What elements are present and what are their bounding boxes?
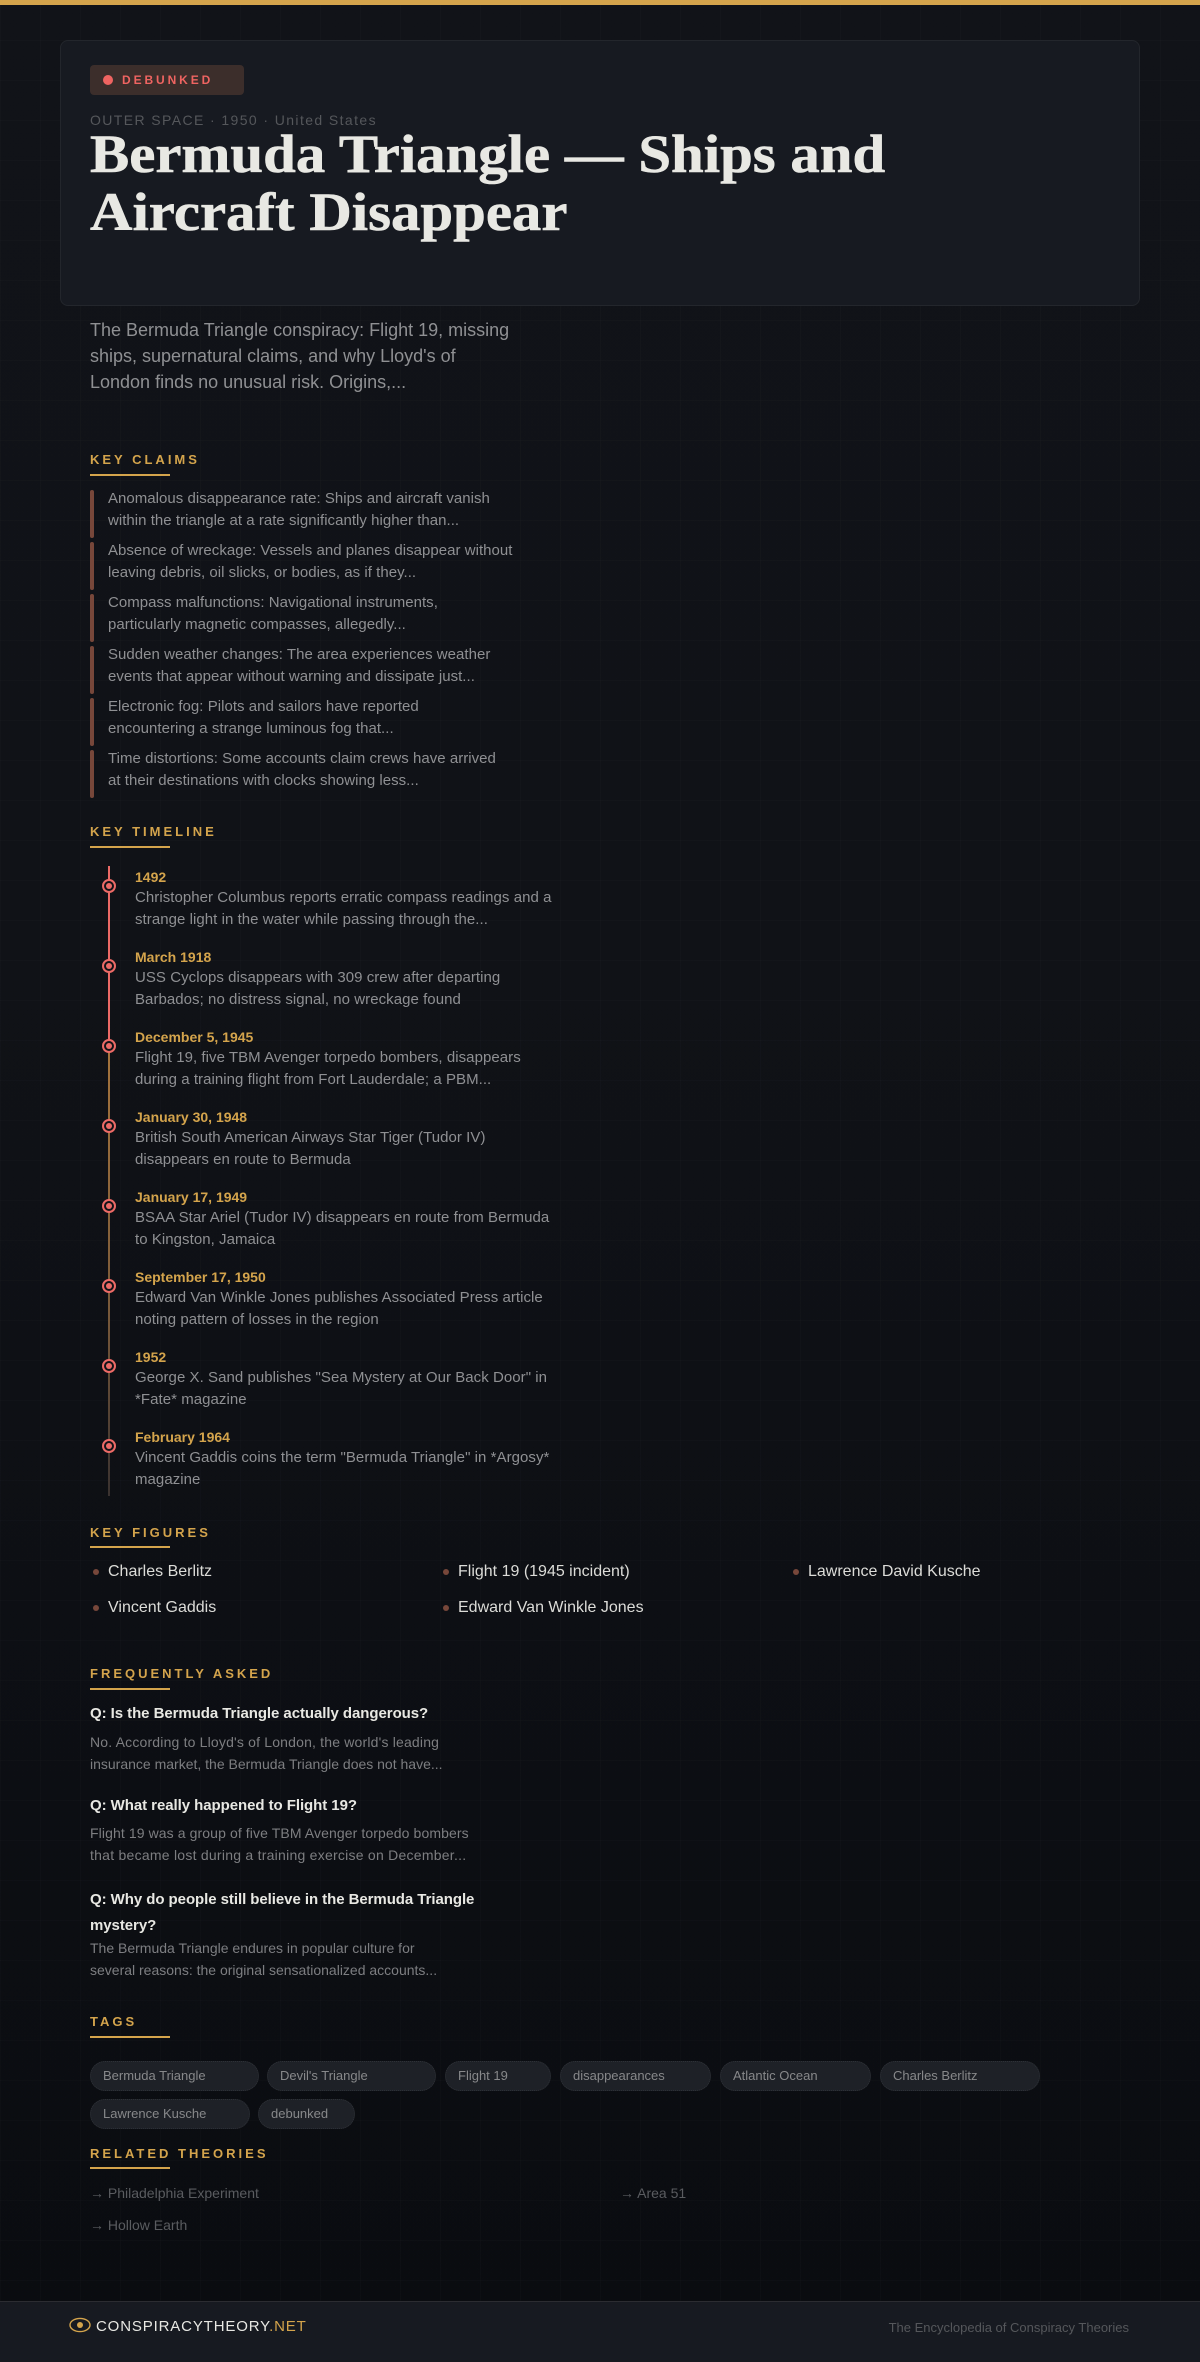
- claim 2: Absence of wreckage: Vessels and planes disappear without: [108, 542, 512, 559]
- faq question 3: mystery?: [90, 1917, 156, 1934]
- claim 6: [90, 750, 496, 798]
- tag: disappearances: [573, 2068, 665, 2083]
- lead paragraph: London finds no unusual risk. Origins,...: [90, 372, 406, 392]
- event January 17, 1949: to Kingston, Jamaica: [135, 1231, 275, 1248]
- event September 17, 1950: noting pattern of losses in the region: [135, 1311, 379, 1328]
- tag: [560, 2061, 711, 2091]
- chart: timeline: January 17, 1949: [135, 1189, 247, 1205]
- event March 1918: USS Cyclops disappears with 309 crew after departing: [135, 969, 500, 986]
- figure: Charles Berlitz: Charles Berlitz: [108, 1563, 212, 1580]
- faq answer 3: several reasons: the original sensationalized accounts...: [90, 1962, 437, 1978]
- tag: Bermuda Triangle: [103, 2068, 206, 2083]
- panel: tags: [90, 2061, 1040, 2129]
- claim 4: [90, 646, 490, 694]
- claim 5: [90, 698, 419, 746]
- tag: Devil's Triangle: [280, 2068, 368, 2083]
- tag: [258, 2099, 355, 2129]
- tag: Lawrence Kusche: [103, 2106, 206, 2121]
- claim 1: within the triangle at a rate significantly higher than...: [108, 512, 459, 529]
- faq answer 2: that became lost during a training exercise on December...: [90, 1847, 466, 1863]
- claim 1: [90, 490, 490, 538]
- related link: Area 51: → Area 51: [620, 2185, 686, 2201]
- tag: Atlantic Ocean: [733, 2068, 818, 2083]
- claim 6: Time distortions: Some accounts claim crews have arrived: [108, 750, 496, 767]
- lead paragraph: The Bermuda Triangle conspiracy: Flight 19, missing: [90, 320, 509, 340]
- claim 6: at their destinations with clocks showing less...: [108, 772, 419, 789]
- faq answer 1: No. According to Lloyd's of London, the world's leading: [90, 1734, 439, 1750]
- tag: [90, 2099, 250, 2129]
- event 1952: [102, 1349, 547, 1408]
- heading: tags: TAGS: [90, 2014, 137, 2029]
- claim 3: particularly magnetic compasses, allegedly...: [108, 616, 406, 633]
- figure: Flight 19: Flight 19 (1945 incident): [458, 1563, 630, 1580]
- event January 30, 1948: disappears en route to Bermuda: [135, 1151, 351, 1168]
- tag: [267, 2061, 436, 2091]
- footer logo: CONSPIRACYTHEORY.NET: [96, 2318, 307, 2335]
- event December 5, 1945: Flight 19, five TBM Avenger torpedo bombers, disappears: [135, 1049, 521, 1066]
- chart: timeline: [102, 866, 552, 1496]
- panel: footer: [0, 2301, 1200, 2362]
- claim 2: [90, 542, 512, 590]
- timeline spine: [108, 866, 110, 1496]
- event 1952: George X. Sand publishes "Sea Mystery at Our Back Door" in: [135, 1369, 547, 1386]
- tag: [445, 2061, 551, 2091]
- chart: timeline: March 1918: [135, 949, 211, 965]
- heading: frequently asked: FREQUENTLY ASKED: [90, 1666, 273, 1681]
- top accent bar: [0, 0, 1200, 5]
- chart: timeline: 1952: [135, 1349, 166, 1365]
- event December 5, 1945: [102, 1029, 521, 1088]
- lead paragraph: [90, 320, 509, 392]
- event February 1964: Vincent Gaddis coins the term "Bermuda Triangle" in *Argosy*: [135, 1449, 549, 1466]
- event September 17, 1950: Edward Van Winkle Jones publishes Associated Press article: [135, 1289, 543, 1306]
- event 1492: Christopher Columbus reports erratic compass readings and a: [135, 889, 551, 906]
- panel: key figures list: [93, 1563, 981, 1616]
- faq answer 2: Flight 19 was a group of five TBM Avenger torpedo bombers: [90, 1825, 469, 1841]
- lead paragraph: ships, supernatural claims, and why Lloyd's of: [90, 346, 456, 366]
- footer tagline: The Encyclopedia of Conspiracy Theories: [889, 2320, 1129, 2335]
- claim 4: events that appear without warning and dissipate just...: [108, 668, 475, 685]
- heading: related theories: RELATED THEORIES: [90, 2146, 268, 2161]
- figure: Edward Van Winkle Jones: Edward Van Winkle Jones: [458, 1599, 644, 1616]
- panel: header card: [60, 40, 1140, 306]
- claim 5: Electronic fog: Pilots and sailors have reported: [108, 698, 419, 715]
- tag: Flight 19: [458, 2068, 508, 2083]
- badge: debunked: [90, 65, 244, 95]
- badge label: DEBUNKED: [122, 73, 213, 87]
- figure: Vincent Gaddis: Vincent Gaddis: [108, 1599, 216, 1616]
- chart: timeline: 1492: [135, 869, 166, 885]
- event February 1964: [102, 1429, 549, 1488]
- faq question 2: Q: What really happened to Flight 19?: [90, 1797, 357, 1814]
- chart: timeline: January 30, 1948: [135, 1109, 247, 1125]
- panel: key claims list: [90, 490, 512, 798]
- claim 5: encountering a strange luminous fog that...: [108, 720, 394, 737]
- icon: eye: [69, 2318, 91, 2332]
- event February 1964: magazine: [135, 1471, 200, 1488]
- heading: key figures: KEY FIGURES: [90, 1525, 211, 1540]
- faq question 3: [90, 1891, 474, 1934]
- claim 4: Sudden weather changes: The area experiences weather: [108, 646, 490, 663]
- event 1492: strange light in the water while passing through the...: [135, 911, 488, 928]
- faq answer 3: [90, 1940, 437, 1978]
- chart: timeline: February 1964: [135, 1429, 230, 1445]
- related link: Hollow Earth: → Hollow Earth: [90, 2217, 187, 2233]
- icon: status dot: [103, 75, 113, 85]
- event December 5, 1945: during a training flight from Fort Lauderdale; a PBM...: [135, 1071, 491, 1088]
- faq answer 2: [90, 1825, 469, 1863]
- faq answer 1: insurance market, the Bermuda Triangle does not have...: [90, 1756, 443, 1772]
- tag: [880, 2061, 1040, 2091]
- faq question 3: Q: Why do people still believe in the Bermuda Triangle: [90, 1891, 474, 1908]
- event January 17, 1949: [102, 1189, 550, 1248]
- event January 30, 1948: British South American Airways Star Tiger (Tudor IV): [135, 1129, 486, 1146]
- tag: [90, 2061, 259, 2091]
- claim 3: [90, 594, 438, 642]
- event January 17, 1949: BSAA Star Ariel (Tudor IV) disappears en route from Bermuda: [135, 1209, 549, 1226]
- tag: Charles Berlitz: [893, 2068, 978, 2083]
- meta line: OUTER SPACE · 1950 · United States: [90, 112, 377, 128]
- event March 1918: [102, 949, 500, 1008]
- title: [90, 124, 885, 242]
- event March 1918: Barbados; no distress signal, no wreckage found: [135, 991, 461, 1008]
- chart: timeline: December 5, 1945: [135, 1029, 253, 1045]
- faq answer 1: [90, 1734, 443, 1772]
- faq question 1: Q: Is the Bermuda Triangle actually dangerous?: [90, 1705, 428, 1722]
- tag: [720, 2061, 871, 2091]
- tag: debunked: [271, 2106, 328, 2121]
- heading: key timeline: KEY TIMELINE: [90, 824, 217, 839]
- related link: Philadelphia Experiment: → Philadelphia Experiment: [90, 2185, 259, 2201]
- heading: key claims: KEY CLAIMS: [90, 452, 200, 467]
- event 1492: [102, 869, 552, 928]
- event January 30, 1948: [102, 1109, 486, 1168]
- title: Bermuda Triangle — Ships and: [90, 124, 885, 184]
- chart: timeline: September 17, 1950: [135, 1269, 266, 1285]
- faq answer 3: The Bermuda Triangle endures in popular culture for: [90, 1940, 415, 1956]
- claim 3: Compass malfunctions: Navigational instruments,: [108, 594, 438, 611]
- event September 17, 1950: [102, 1269, 543, 1328]
- claim 1: Anomalous disappearance rate: Ships and aircraft vanish: [108, 490, 490, 507]
- claim 2: leaving debris, oil slicks, or bodies, as if they...: [108, 564, 416, 581]
- event 1952: *Fate* magazine: [135, 1391, 247, 1408]
- figure: Lawrence David Kusche: Lawrence David Kusche: [808, 1563, 981, 1580]
- title: Aircraft Disappear: [90, 182, 567, 242]
